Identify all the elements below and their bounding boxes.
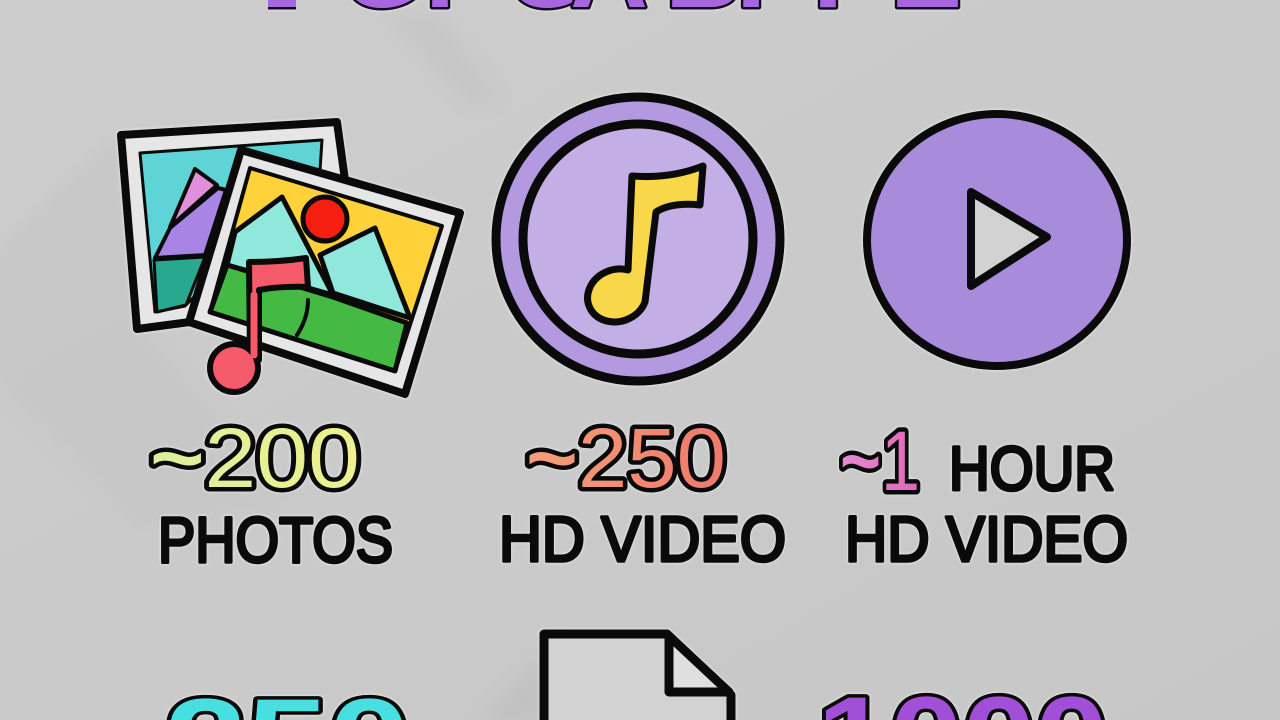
stat: about 200 photos — [150, 411, 393, 576]
number: ~1 — [840, 414, 920, 508]
icon: music circle — [496, 97, 780, 381]
stat: about 1 hour HD video — [840, 414, 1128, 575]
icon: document, cropped at the bottom — [544, 634, 731, 720]
icon: photos with music note — [121, 122, 460, 394]
front photo — [189, 150, 460, 394]
yellow note — [588, 166, 703, 322]
icon: play circle — [867, 114, 1127, 366]
number: ~200 — [150, 411, 360, 505]
label: HD VIDEO — [499, 503, 786, 575]
back photo — [121, 122, 345, 329]
pink music note — [210, 258, 308, 392]
label: PHOTOS — [158, 504, 393, 576]
number: ~250 — [526, 411, 726, 505]
video label: HD VIDEO — [845, 503, 1128, 575]
stat: about 250 HD video — [499, 411, 786, 575]
hour label: HOUR — [949, 435, 1115, 504]
